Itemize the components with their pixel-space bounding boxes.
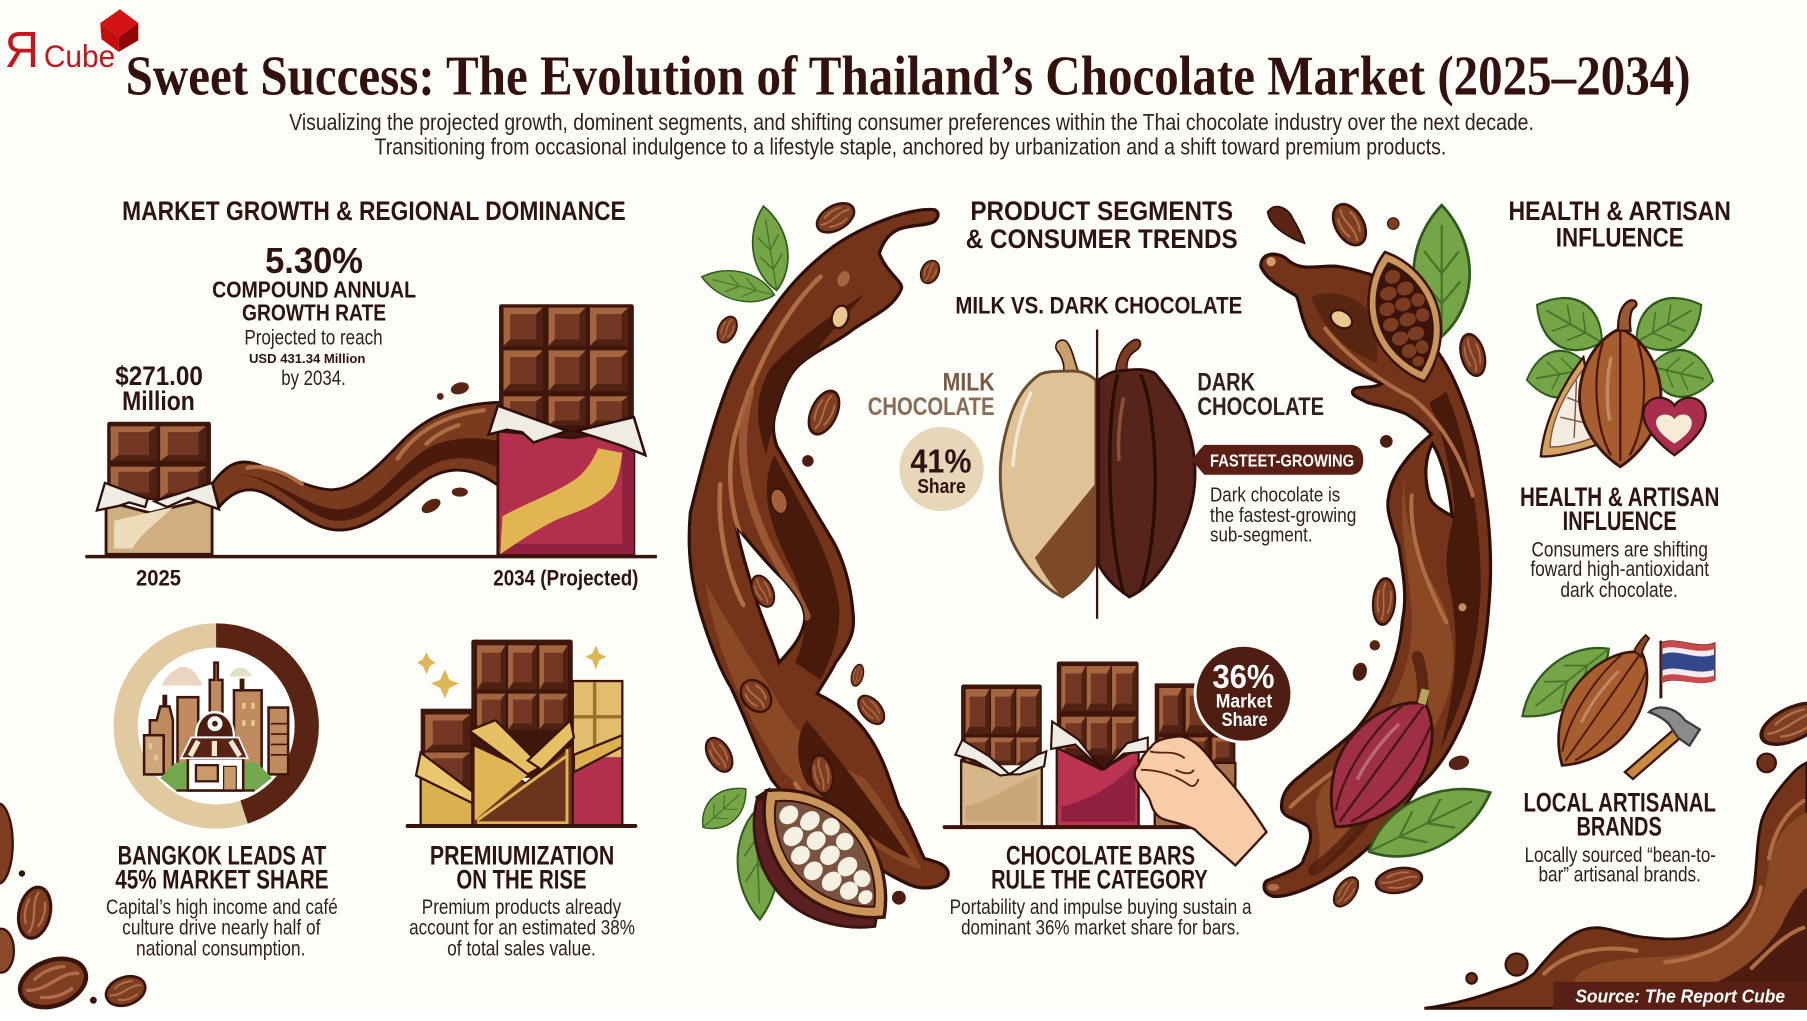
text: premiumization: account for an estimated 38% [409,916,635,940]
icon: leaves top [698,203,794,309]
CAGR callout [212,241,416,390]
CAGR callout: GROWTH RATE [242,299,386,325]
CAGR callout: by 2034. [281,366,346,390]
text: premiumization [409,840,635,960]
text: bangkok leads: national consumption. [136,936,305,960]
text: dark chocolate note [1210,484,1356,547]
badge: 36% market share: Share [1222,709,1268,731]
text: dark chocolate note: the fastest-growing [1210,505,1356,527]
heading: milk vs dark: MILK VS. DARK CHOCOLATE [955,292,1242,319]
CAGR callout: COMPOUND ANNUAL [212,276,416,302]
text: health and artisan influence: HEALTH & ARTISAN [1520,482,1719,512]
CAGR callout: 5.30% [265,241,363,281]
heading: product segments: PRODUCT SEGMENTS [970,196,1233,226]
chart: chocolate bars on shelf [943,661,1235,829]
chart: chocolate stream between bars [212,380,502,530]
swirl shading [1291,293,1481,876]
text: local artisanal brands: bar” artisanal brands. [1538,863,1701,887]
badge: 36% market share: 36% [1212,659,1275,696]
badge: 41% share [899,427,984,511]
text: local artisanal brands [1523,787,1716,887]
icon: leaf and open pod top [1352,205,1470,392]
CAGR callout: USD 431.34 Million [249,352,365,366]
text: health and artisan influence: Consumers are shifting [1532,538,1708,562]
source band: Source: The Report Cube [1575,986,1785,1007]
badge: fastest growing: FASTEET-GROWING [1210,451,1354,471]
text: health and artisan influence [1520,482,1719,602]
label: dark chocolate: CHOCOLATE [1197,393,1324,421]
text: local artisanal brands: Locally sourced “bean-to- [1525,843,1716,867]
panel: health and artisan influence [1508,196,1731,887]
text: dark chocolate note: sub-segment. [1210,525,1313,547]
decoration: bottom-left cocoa beans [0,803,149,1016]
subtitle: Transitioning from occasional indulgence to a lifestyle staple, anchored by urbanization and a shift toward premium products. [375,133,1446,159]
icon: premium bars [406,640,637,828]
text: bangkok leads: culture drive nearly half of [122,916,320,940]
text: dark chocolate note: Dark chocolate is [1210,484,1340,506]
text: health and artisan influence: dark chocolate. [1560,578,1678,602]
text: premiumization: PREMIUMIZATION [430,840,614,870]
badge: 36% market share [1195,645,1292,742]
label: milk chocolate [868,369,995,421]
label: dark chocolate: DARK [1197,369,1256,397]
value label 2025: $271.00 [115,361,203,391]
text: chocolate bars [950,840,1252,940]
label: milk chocolate: CHOCOLATE [868,393,995,421]
text: local artisanal brands: LOCAL ARTISANAL [1523,787,1716,817]
text: premiumization: of total sales value. [447,936,596,960]
value label 2025 [115,361,203,416]
chart: 2034 chocolate bar [489,304,645,554]
text: premiumization: ON THE RISE [456,864,587,894]
text: chocolate bars: RULE THE CATEGORY [991,864,1208,894]
text: bangkok leads [106,840,338,960]
text: chocolate bars: CHOCOLATE BARS [1006,840,1195,870]
illustration: right chocolate swirl [1261,199,1502,911]
chart: 2025 chocolate bar [97,422,219,554]
icon: half milk half dark pod [1000,330,1195,619]
icon: hand picking bar [1135,736,1266,865]
panel: premiumization [406,640,637,960]
text: health and artisan influence: foward high-antioxidant [1530,557,1709,581]
logo: RCube: Cube [44,39,115,74]
text: bangkok leads: Capital’s high income and café [106,895,338,919]
axis baseline [85,555,657,558]
icon: scattered beans left [700,197,943,905]
axis labels [136,565,638,590]
heading: health and artisan: INFLUENCE [1556,223,1684,253]
text: bangkok leads: BANGKOK LEADS AT [118,840,326,870]
subtitle: Visualizing the projected growth, dominent segments, and shifting consumer preferences within the Thai chocolate industry over the next decade. [289,109,1534,135]
swirl ribbon [689,210,948,888]
icon: open cocoa pod with leaves [693,760,917,959]
badge: 41% share: Share [917,475,966,498]
text: premiumization: Premium products already [422,895,621,919]
label: milk chocolate: MILK [943,369,995,397]
text: local artisanal brands: BRANDS [1576,811,1662,841]
text: chocolate bars: dominant 36% market share for bars. [961,916,1240,940]
text: bangkok leads: 45% MARKET SHARE [115,864,328,894]
logo: RCube [5,9,138,78]
CAGR callout: Projected to reach [244,326,383,350]
divider line [1096,330,1098,619]
panel: bangkok share [106,636,338,960]
subtitle [289,109,1534,159]
text: chocolate bars: Portability and impulse buying sustain a [950,895,1252,919]
donut chart: 45% share with city [126,636,307,816]
swirl shading [705,277,922,870]
text: health and artisan influence: INFLUENCE [1563,506,1677,536]
label: dark chocolate [1197,369,1324,421]
panel: product segments [868,196,1363,940]
source band [1553,982,1807,1009]
heading: health and artisan: HEALTH & ARTISAN [1508,196,1731,226]
icon: scattered beans right [1268,199,1489,911]
heading: health and artisan [1508,196,1731,253]
axis labels: 2034 (Projected) [493,565,638,590]
badge: 41% share: 41% [910,443,971,480]
swirl droplets [1266,257,1466,891]
icon: pod, flag and hammer [1509,631,1715,785]
heading: market growth: MARKET GROWTH & REGIONAL DOMINANCE [122,196,626,226]
logo: RCube: Я [5,21,39,78]
heading: product segments: & CONSUMER TRENDS [966,224,1238,254]
value label 2025: Million [122,386,195,416]
panel: market growth and regional dominance [85,196,657,590]
decoration: bottom-right chocolate splash [1424,695,1807,1008]
axis labels: 2025 [136,565,181,590]
heading: product segments [966,196,1238,254]
swirl embedded beans [735,269,852,795]
illustration: left chocolate swirl [689,197,948,959]
badge: fastest growing [1193,445,1363,475]
icon: pod, leaves and heart [1523,283,1718,467]
badge: 36% market share: Market [1216,691,1273,713]
swirl ribbon [1261,254,1491,897]
icon: crimson pod with leaf [1303,680,1502,875]
